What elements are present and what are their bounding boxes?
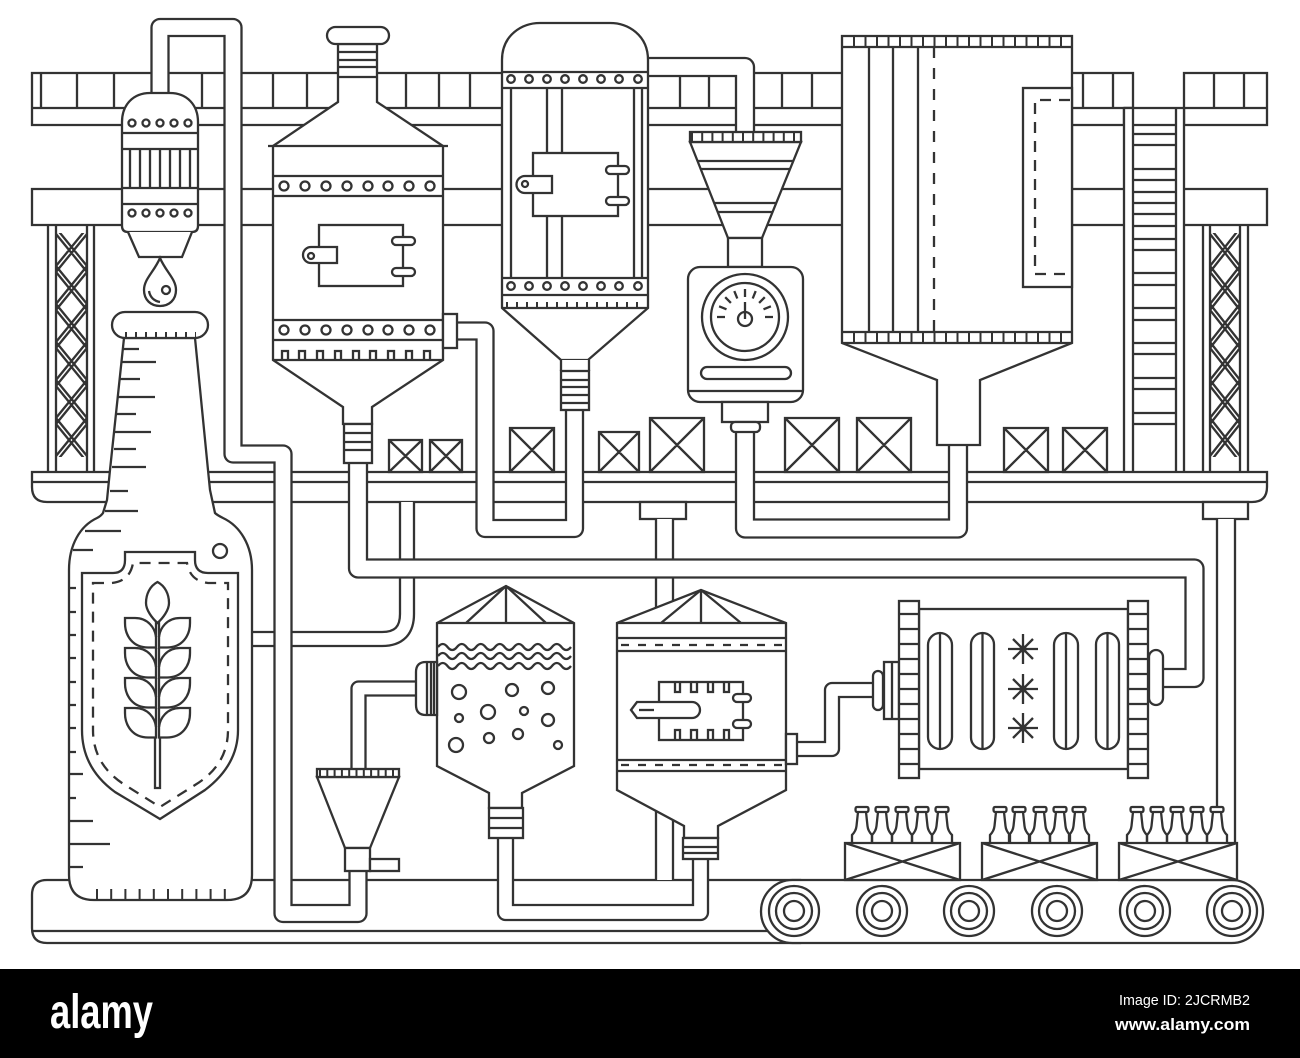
gauge box	[688, 267, 803, 402]
tall domed tank	[502, 23, 648, 410]
door: large fermenter	[303, 225, 415, 286]
right lattice column	[1203, 225, 1248, 472]
door: silo	[631, 682, 751, 740]
left lattice column	[48, 225, 94, 472]
image id: Image ID: 2JCRMB2	[1119, 992, 1250, 1009]
footer bar	[0, 969, 1300, 1058]
large fermenter tank	[268, 27, 457, 463]
big storage tank	[842, 36, 1072, 445]
pipe: tank to cooler inlet	[795, 690, 875, 749]
pipe: U under tanks one	[457, 331, 574, 528]
rollers	[769, 886, 1257, 936]
icon: drop	[144, 258, 176, 306]
conveyor belt	[761, 880, 1263, 943]
icon: snowflakes	[1008, 634, 1038, 743]
bubbles	[449, 682, 562, 752]
beer bottle	[69, 312, 252, 900]
base beam	[32, 472, 1267, 502]
crate 1 with bottles	[845, 807, 960, 880]
pipe: tank to cooler	[358, 463, 1194, 678]
icon: wheat	[125, 582, 190, 788]
ladder	[1124, 108, 1184, 472]
pipe: gauge to large tank	[745, 432, 958, 528]
crate 2 with bottles	[982, 807, 1097, 880]
second beam	[32, 189, 1267, 225]
silo tank with door	[617, 590, 797, 859]
pipe: bottle feed	[250, 502, 407, 639]
website: www.alamy.com	[1114, 1015, 1250, 1034]
label shield	[82, 552, 238, 819]
pipe: U under lower tanks	[506, 838, 700, 912]
door: tall tank	[516, 153, 629, 216]
pipe: top long run	[160, 28, 358, 914]
top truss beam	[32, 73, 1267, 125]
pipe: centre vertical	[655, 519, 674, 880]
coils	[928, 633, 1119, 749]
bottle measuring ticks	[69, 349, 156, 867]
stacked boxes	[389, 418, 1107, 472]
floor platform	[32, 880, 800, 943]
crate 3 with bottles	[1119, 807, 1237, 880]
pipe supports	[640, 502, 1248, 519]
side panel	[1023, 88, 1072, 287]
pipe: hopper to tank	[358, 688, 418, 769]
hopper with gauge	[688, 132, 803, 432]
bubbling silo tank	[416, 586, 574, 838]
cooling unit	[873, 601, 1163, 778]
lower hopper	[317, 769, 399, 871]
pipe: right vertical	[1217, 519, 1235, 843]
small top tank	[122, 93, 198, 257]
footer logo: alamy	[50, 986, 153, 1039]
pipe: tall tank to hopper	[646, 67, 745, 134]
